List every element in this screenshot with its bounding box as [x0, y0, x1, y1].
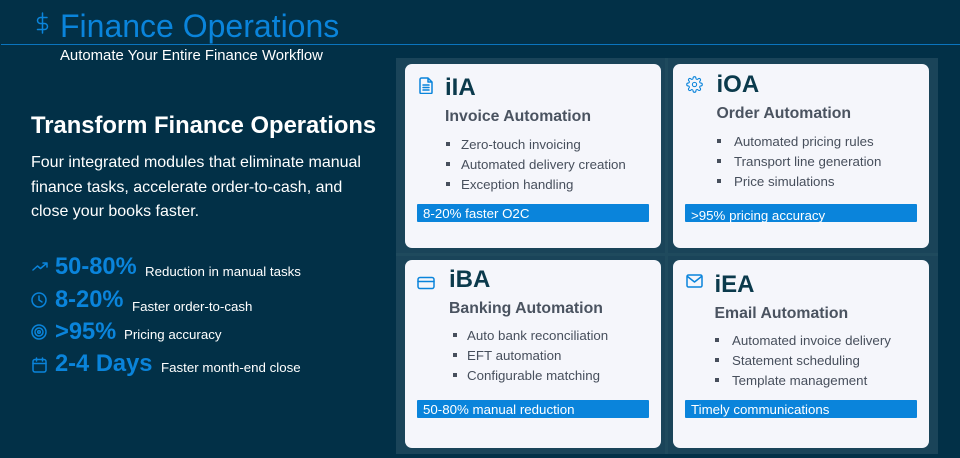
- subtitle: Automate Your Entire Finance Workflow: [60, 48, 323, 64]
- title: Finance Operations: [60, 8, 339, 44]
- metric bar: Timely communications: [691, 402, 829, 417]
- metric bar: [685, 400, 916, 418]
- features: [715, 333, 891, 388]
- module code: iBA: [449, 266, 490, 293]
- card: iOA: [672, 64, 929, 248]
- card: iIA: [404, 64, 661, 248]
- features: Exception handling: [461, 177, 573, 192]
- stat: month-end close: 2-4 Days: [55, 351, 152, 377]
- header rule: [1, 44, 960, 45]
- stat: order-to-cash: 8-20%: [55, 287, 123, 313]
- module code: iEA: [714, 271, 755, 298]
- icon: credit card: [417, 276, 435, 290]
- metric bar: [417, 204, 648, 222]
- module code: iIA: [445, 74, 476, 101]
- intro text: close your books faster.: [31, 203, 199, 220]
- features: Configurable matching: [467, 368, 600, 383]
- features: Transport line generation: [734, 154, 881, 169]
- stat: pricing accuracy: >95%: [55, 319, 116, 345]
- metric bar: [685, 204, 916, 222]
- card: iEA: [672, 260, 929, 448]
- left intro: [31, 112, 376, 220]
- stat: month-end close: [32, 351, 301, 377]
- module grid background: [396, 58, 938, 454]
- stat: manual tasks: [32, 254, 301, 280]
- stat: manual tasks: Reduction in manual tasks: [145, 264, 301, 279]
- card: iBA: [404, 260, 661, 448]
- module code: iOA: [716, 71, 759, 98]
- module name: Email Automation: [714, 305, 848, 322]
- stat: pricing accuracy: [31, 319, 222, 345]
- icon: envelope: [686, 274, 703, 288]
- stat: pricing accuracy: Pricing accuracy: [124, 327, 222, 342]
- features: [446, 137, 626, 192]
- metric bar: [417, 400, 648, 418]
- header: [1, 8, 960, 64]
- features: [453, 328, 608, 383]
- features: Automated pricing rules: [734, 134, 874, 149]
- intro text: [31, 154, 361, 220]
- features: Automated invoice delivery: [732, 333, 891, 348]
- features: [717, 134, 881, 189]
- features: Zero-touch invoicing: [461, 137, 581, 152]
- features: Automated delivery creation: [461, 157, 626, 172]
- stat: manual tasks: 50-80%: [55, 254, 137, 280]
- metric bar: >95% pricing accuracy: [691, 208, 825, 223]
- stats list: [31, 254, 301, 377]
- intro text: Four integrated modules that eliminate manual: [31, 154, 361, 171]
- stat: order-to-cash: Faster order-to-cash: [132, 299, 252, 314]
- icon: document: [419, 77, 433, 94]
- stat: order-to-cash: [31, 287, 252, 314]
- metric bar: 8-20% faster O2C: [423, 206, 529, 221]
- intro heading: Transform Finance Operations: [31, 112, 376, 139]
- features: Price simulations: [734, 174, 834, 189]
- module name: Invoice Automation: [445, 108, 591, 125]
- intro text: finance tasks, accelerate order-to-cash, and: [31, 178, 342, 196]
- module name: Banking Automation: [449, 300, 603, 317]
- module name: Order Automation: [716, 105, 851, 122]
- icon: dollar: [36, 12, 48, 34]
- features: Auto bank reconciliation: [467, 328, 608, 343]
- features: Template management: [732, 373, 867, 388]
- stat: month-end close: Faster month-end close: [161, 360, 301, 375]
- features: EFT automation: [467, 348, 561, 363]
- metric bar: 50-80% manual reduction: [423, 402, 575, 417]
- features: Statement scheduling: [732, 353, 860, 368]
- icon: gear: [686, 76, 703, 93]
